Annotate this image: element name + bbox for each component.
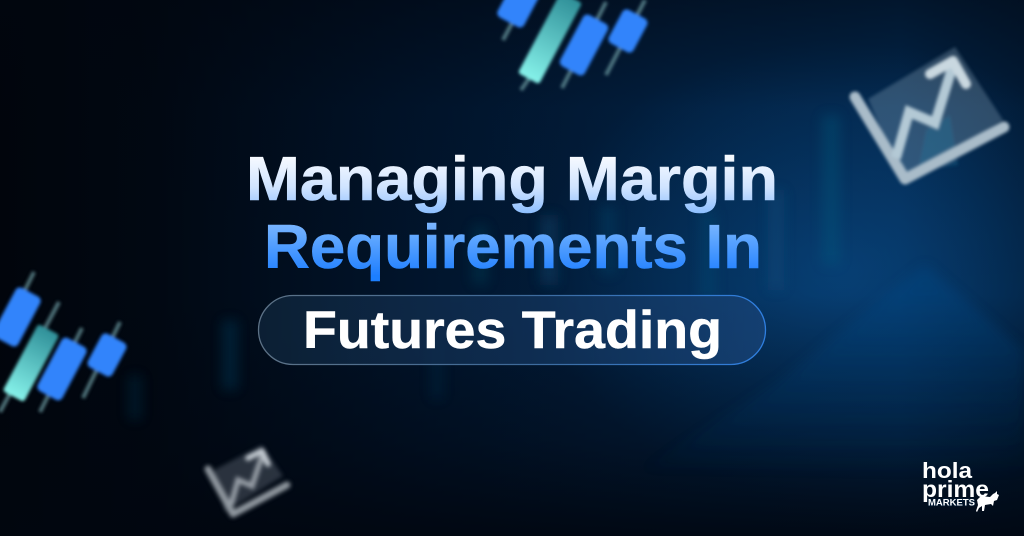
pill text: Futures Trading	[303, 301, 722, 360]
candle 1	[0, 272, 43, 348]
candle 4	[606, 0, 649, 75]
candle 3	[558, 2, 610, 88]
pill: futures trading	[258, 296, 766, 364]
logo word prime: prime	[922, 476, 989, 502]
icon: growth chart top right	[855, 47, 1004, 180]
candle 2 teal	[518, 0, 582, 90]
blurred background chart	[128, 115, 1024, 480]
title line 1: Managing Margin	[246, 145, 778, 214]
candle 1	[495, 0, 545, 40]
icon: growth chart bottom left	[208, 445, 287, 514]
candle 4	[83, 322, 128, 398]
candlesticks: left	[0, 272, 128, 412]
title	[246, 145, 778, 282]
icon: bull	[976, 491, 999, 512]
candle 3	[36, 328, 88, 412]
logo word hola: hola	[922, 458, 973, 483]
candlesticks: top centre	[495, 0, 649, 90]
logo: hola prime markets	[922, 458, 999, 512]
title line 2: Requirements In	[264, 213, 762, 282]
candle 2 teal	[0, 302, 59, 412]
logo word markets: MARKETS	[928, 498, 975, 508]
